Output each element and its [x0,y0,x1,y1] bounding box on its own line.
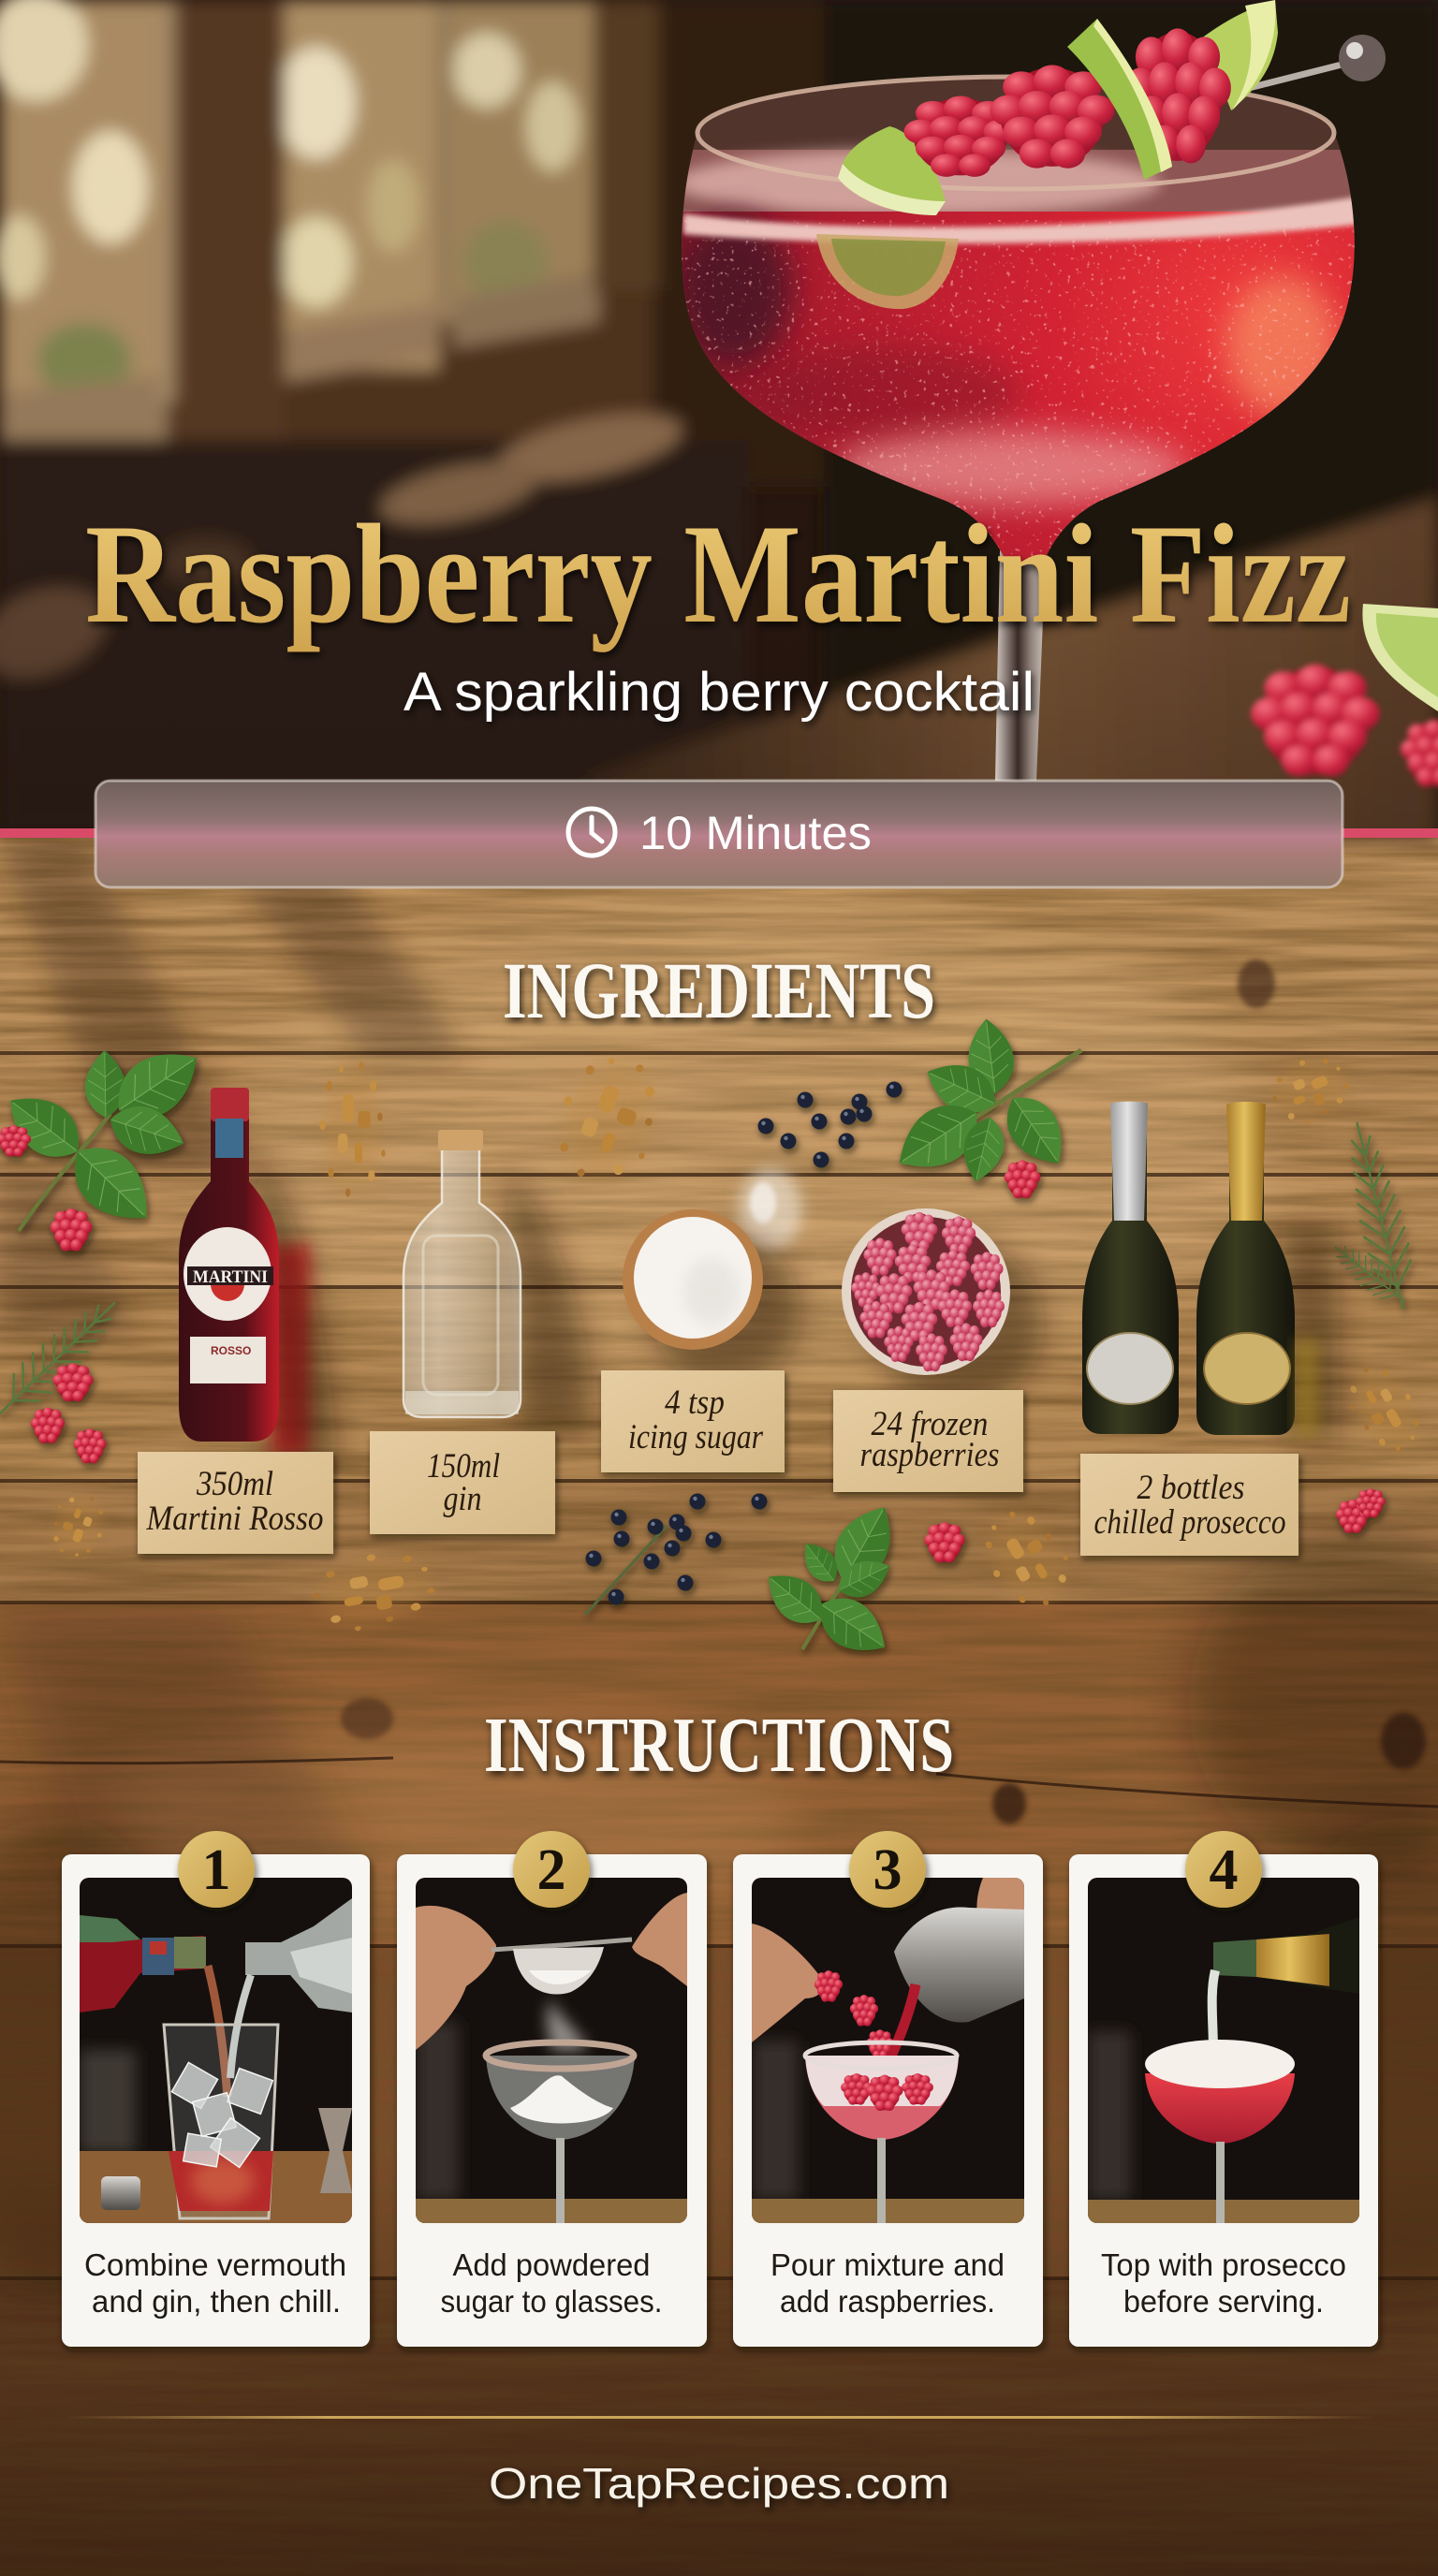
glass stem [995,550,1046,781]
lime wedge in front of raspberries [1067,19,1172,180]
step 1 text [84,2247,346,2319]
time pill [95,781,1343,887]
ingredient: frozen raspberries bowl [842,1208,1044,1409]
ingredient: gin bottle [404,1130,592,1432]
image: topping with prosecco [1088,1878,1359,2223]
bottle: gold foil [1196,1102,1318,1437]
decoration: rosemary left and raspberries [0,1288,129,1463]
ingredient label: 4 tsp icing sugar: 4 tsp [665,1383,725,1422]
ingredient label: 350ml Martini Rosso: Martini Rosso [146,1500,324,1538]
step 4 number badge: 4 [1210,1838,1238,1902]
garnish pick [1226,35,1386,94]
step 1 text: and gin, then chill. [92,2284,341,2319]
step 3 text: add raspberries. [780,2284,995,2319]
step 3 number badge [849,1831,926,1908]
ingredient label: 2 bottles chilled prosecco: 2 bottles [1137,1469,1245,1507]
panel: step 2 card [397,1831,707,2347]
raspberry garnishes [904,28,1231,177]
decoration: raspberry leaves bottom [756,1495,965,1666]
ingredient label: 24 frozen raspberries [833,1390,1023,1492]
heading: ingredients: INGREDIENTS [503,945,935,1035]
panel: step 1 card [62,1831,370,2347]
icon: raspberries on table [1251,665,1438,787]
ingredient label: 24 frozen raspberries: raspberries [859,1436,1000,1474]
step 2 text [440,2247,663,2319]
glass bowl and drink [674,66,1367,571]
image: pouring and adding raspberries [752,1878,1024,2223]
decoration: spilled sugar [739,1168,802,1251]
ingredient: Martini Rosso bottle: ROSSO [211,1344,251,1357]
decoration: juniper berries top [758,1082,902,1168]
ingredient: icing sugar bowl [623,1209,800,1387]
icon: clock [568,809,615,856]
decoration: rosemary right and raspberry [1327,1119,1423,1533]
footer website: OneTapRecipes.com [489,2459,949,2508]
lime slice in drink [816,234,959,309]
step 3 text [770,2247,1005,2319]
ingredient label: 350ml Martini Rosso: 350ml [196,1465,273,1503]
decoration: raspberry leaves top right [885,1017,1081,1198]
decoration: crumbs and spices [43,1045,1431,1637]
ingredient label: 2 bottles chilled prosecco [1080,1454,1299,1556]
step 2 text: Add powdered [453,2247,650,2282]
ingredient label: 2 bottles chilled prosecco: chilled prosecco [1093,1503,1286,1542]
step 3 text: Pour mixture and [770,2247,1005,2282]
decoration: raspberry leaves top left [0,1034,213,1251]
ingredient: Martini Rosso bottle [179,1088,337,1460]
time label: 10 Minutes [639,807,872,859]
ingredient label: 350ml Martini Rosso [138,1452,333,1554]
icon: lime wedge on table [1362,604,1438,711]
panel: step 3 card [733,1831,1043,2347]
step 1 text: Combine vermouth [84,2247,346,2282]
panel: step 4 card [1069,1831,1378,2347]
step 2 number badge: 2 [537,1838,565,1902]
ingredient label: 150ml gin [370,1431,555,1534]
pink divider strip [0,828,1438,838]
glass rim [697,77,1334,189]
step 1 number badge: 1 [202,1838,230,1902]
panel: hero photo background [0,0,1438,842]
lime wedge garnishes [838,0,1278,215]
ingredient label: 4 tsp icing sugar [601,1370,785,1472]
subtitle: A sparkling berry cocktail [404,662,1034,723]
step 2 text: sugar to glasses. [440,2284,663,2319]
ingredient: prosecco bottles [1082,1102,1339,1442]
image: combining vermouth and gin [80,1878,352,2223]
ingredient label: 24 frozen raspberries: 24 frozen [871,1405,989,1443]
image: hero cocktail glass [674,0,1386,781]
step 4 text: before serving. [1123,2284,1324,2319]
image: sifting sugar into glass [416,1878,687,2223]
decoration: juniper berries bottom [585,1494,768,1615]
gold footer rule [65,2416,1376,2419]
ingredient label: 4 tsp icing sugar: icing sugar [628,1418,764,1456]
bottle: silver foil [1082,1102,1179,1434]
step 3 number badge: 3 [873,1838,902,1902]
panel: wood table background [0,838,1438,2576]
step 2 number badge [513,1831,590,1908]
heading: instructions: INSTRUCTIONS [484,1702,954,1789]
step 4 text: Top with prosecco [1101,2247,1346,2282]
ingredient label: 150ml gin: gin [444,1480,481,1518]
step 4 number badge [1185,1831,1262,1908]
ingredient: Martini Rosso bottle: MARTINI [193,1267,268,1287]
step 4 text [1101,2247,1346,2319]
ingredient label: 150ml gin: 150ml [427,1447,500,1486]
step 1 number badge [178,1831,255,1908]
